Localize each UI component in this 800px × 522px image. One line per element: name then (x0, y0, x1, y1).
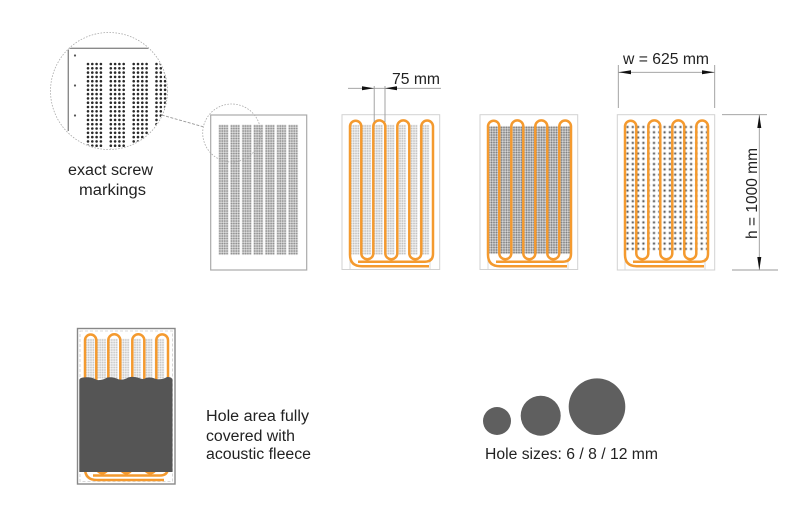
connector line between detail circle and panel (162, 115, 203, 127)
panel 4: heating tube over coarse hole pattern (617, 115, 715, 270)
panel 3: heating tube over dense hole area (480, 115, 578, 270)
caption: hole area covered with fleece: Hole area fully (206, 408, 309, 425)
dimension: height 1000 mm: h = 1000 mm (744, 148, 761, 239)
dimension: width 625 mm (618, 51, 715, 108)
caption: exact screw markings: markings (79, 182, 146, 199)
panel 5: panel covered with acoustic fleece (78, 328, 175, 484)
caption: exact screw markings: exact screw (68, 162, 154, 179)
caption: exact screw markings (68, 162, 154, 199)
caption: hole sizes: Hole sizes: 6 / 8 / 12 mm (485, 446, 658, 463)
magnified detail: exact screw markings (50, 32, 168, 150)
caption: hole area covered with fleece: covered with (206, 428, 295, 445)
dimension: width 625 mm: w = 625 mm (622, 51, 709, 68)
caption: hole area covered with fleece (206, 408, 311, 463)
dimension: 75 mm tube spacing: 75 mm (392, 71, 440, 88)
panel 2: heating tube over light hole strips (342, 115, 440, 270)
dimension: 75 mm tube spacing (348, 71, 441, 122)
panel 1: perforated board with screw markings (203, 104, 307, 270)
dimension: height 1000 mm (722, 115, 778, 270)
caption: hole area covered with fleece: acoustic fleece (206, 446, 311, 463)
acoustic fleece cover (79, 377, 172, 472)
hole sizes: three circles (483, 378, 625, 436)
